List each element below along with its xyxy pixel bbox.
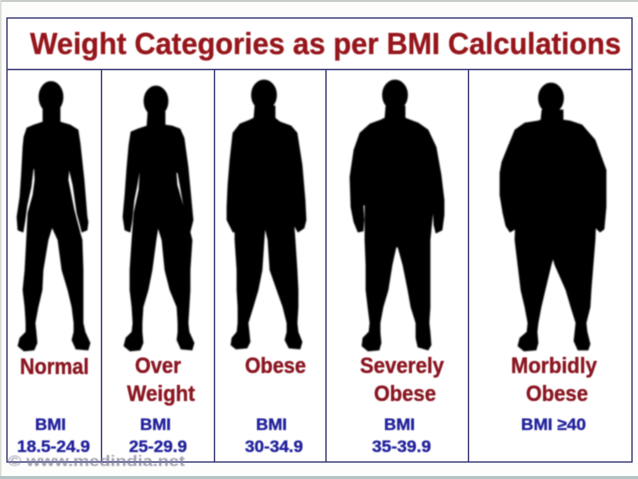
- bmi: severely obese: [372, 415, 431, 456]
- panel: severely obese: [350, 80, 445, 456]
- label: morbidly obese: Obese: [526, 381, 588, 406]
- bmi: normal: 18.5-24.9: [17, 437, 90, 456]
- label: morbidly obese: [511, 353, 598, 406]
- silhouette: normal: [17, 82, 90, 351]
- label: normal: Normal: [20, 354, 89, 379]
- bmi: normal: [17, 415, 90, 456]
- label: severely obese: Obese: [374, 381, 436, 406]
- bmi: over weight: BMI: [140, 415, 171, 434]
- label: morbidly obese: Morbidly: [511, 353, 598, 378]
- panel: obese: [227, 80, 306, 456]
- panel: morbidly obese: [500, 83, 606, 434]
- silhouette: over weight: [123, 86, 194, 351]
- label: severely obese: Severely: [360, 353, 445, 378]
- bmi: over weight: 25-29.9: [129, 437, 187, 456]
- silhouette: severely obese: [350, 80, 444, 351]
- panel: normal: [17, 82, 90, 456]
- bmi: severely obese: BMI: [384, 415, 415, 434]
- bmi: morbidly obese: BMI ≥40: [521, 415, 586, 434]
- label: over weight: [127, 353, 196, 406]
- silhouette: morbidly obese: [500, 83, 606, 351]
- label: over weight: Weight: [127, 381, 196, 406]
- bmi: obese: 30-34.9: [245, 437, 303, 456]
- watermark: © www.medindia.net: [8, 453, 185, 470]
- label: obese: Obese: [245, 353, 306, 378]
- panel: over weight: [123, 86, 196, 456]
- silhouette: obese: [227, 80, 306, 349]
- bmi: obese: [245, 415, 303, 456]
- bmi: obese: BMI: [256, 415, 287, 434]
- bmi: over weight: [129, 415, 187, 456]
- label: severely obese: [360, 353, 445, 406]
- bmi: normal: BMI: [35, 415, 66, 434]
- label: over weight: Over: [135, 353, 181, 378]
- bmi: severely obese: 35-39.9: [372, 437, 431, 456]
